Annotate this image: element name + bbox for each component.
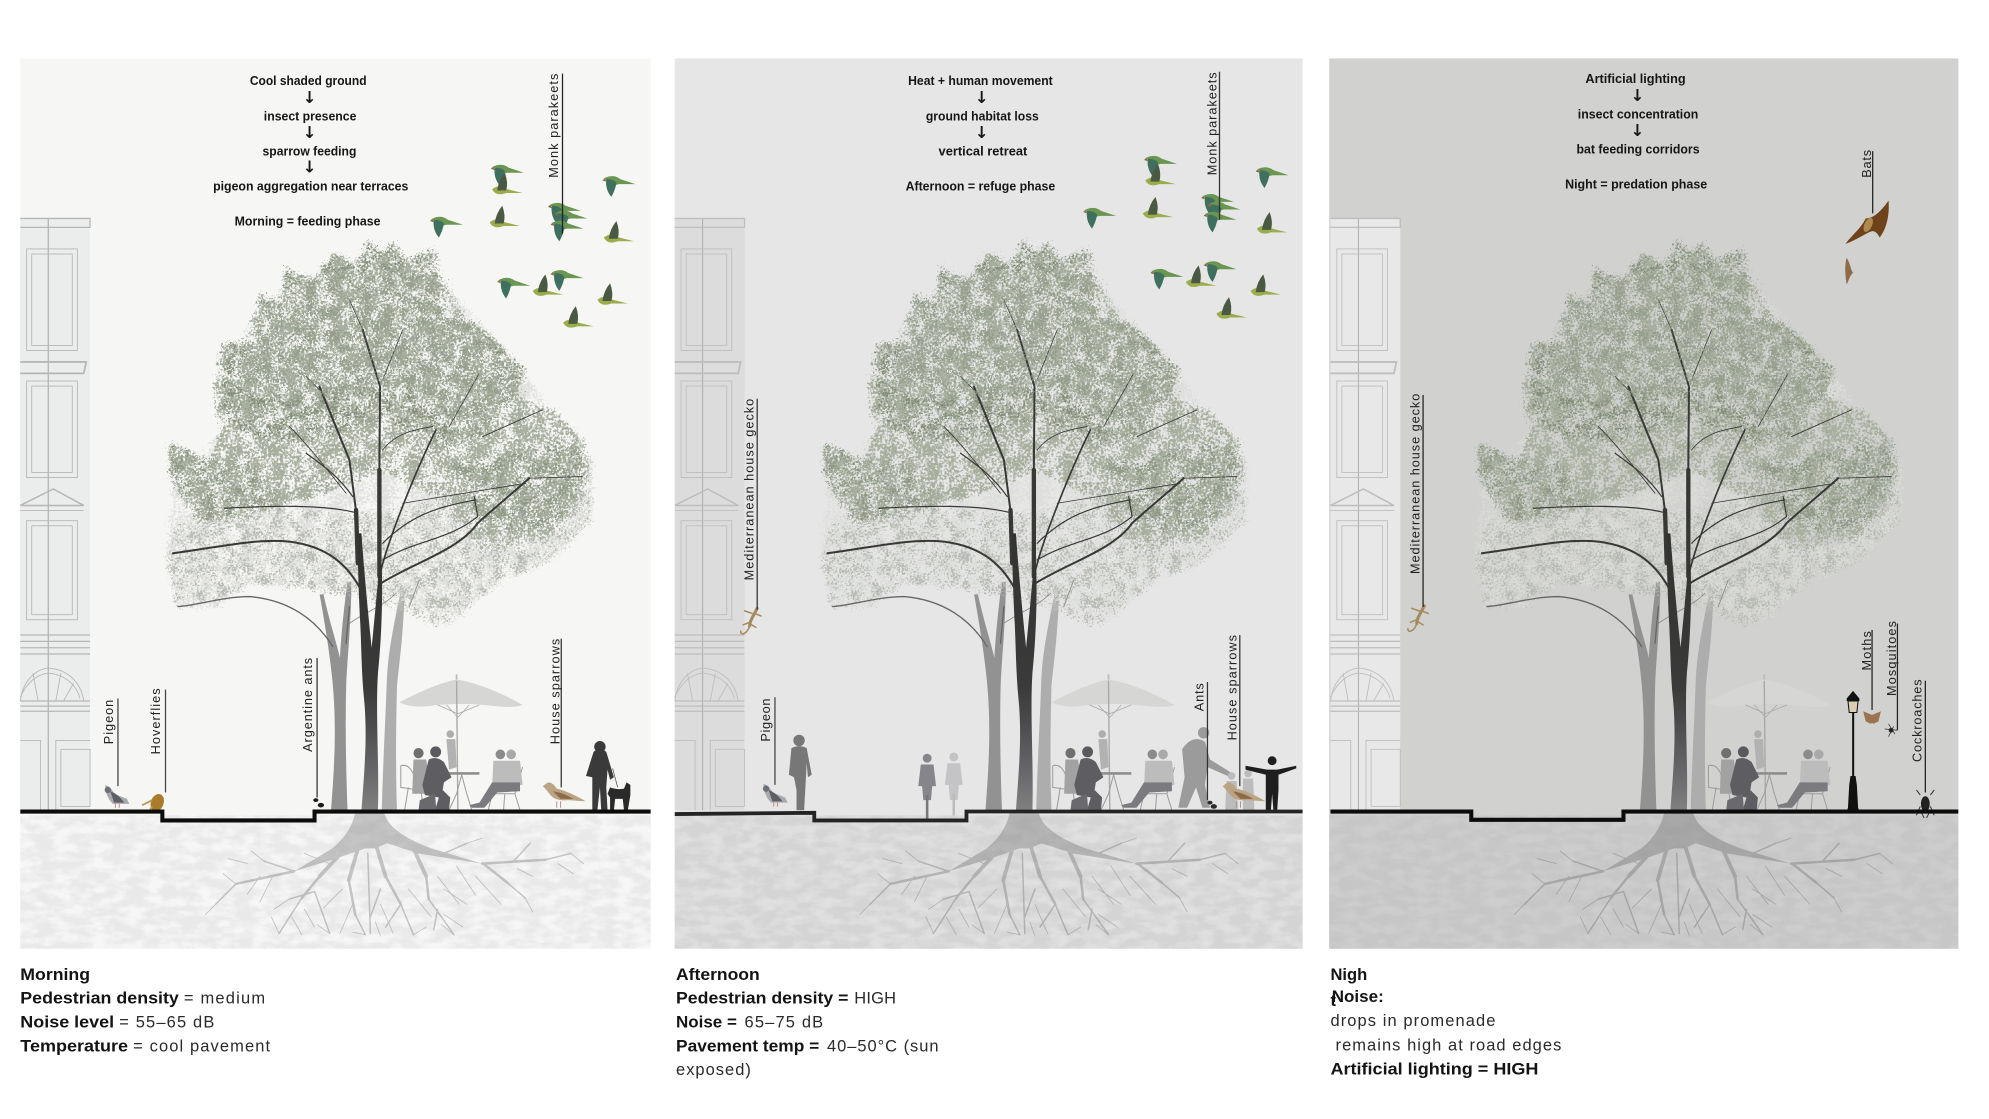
icon: ant (1207, 801, 1217, 809)
caption: afternoon: HIGH (854, 989, 896, 1007)
flow text: morning: pigeon aggregation near terraces (213, 179, 408, 194)
flow text: night: insect concentration (1578, 108, 1698, 122)
pedestrian silhouette (789, 735, 812, 810)
label: Monk parakeets: Monk parakeets (547, 74, 561, 178)
label: House sparrows: House sparrows (548, 639, 562, 744)
children silhouettes (1225, 770, 1254, 810)
afternoon parakeet flock (1083, 156, 1289, 319)
caption: morning: Temperature (20, 1038, 128, 1056)
morning cafe table and diners (401, 730, 523, 810)
morning building facade (20, 218, 90, 810)
flow text: night (1565, 72, 1707, 192)
flow text: morning: Cool shaded ground (250, 74, 367, 88)
label: Cockroaches (1911, 679, 1925, 792)
night sky background (1329, 58, 1958, 949)
caption: morning: Noise level (20, 1013, 114, 1031)
flow text: morning: Morning = feeding phase (235, 214, 380, 228)
child with outstretched arms silhouette (1246, 756, 1296, 810)
label: Moths (1860, 630, 1874, 710)
label: Moths: Moths (1860, 631, 1874, 671)
afternoon tree (821, 240, 1247, 810)
icon: ant (313, 798, 324, 807)
label: Mosquitoes (1885, 621, 1899, 730)
afternoon roots (860, 813, 1238, 936)
dog silhouette (608, 768, 630, 810)
label: Mosquitoes: Mosquitoes (1885, 621, 1899, 696)
icon: sparrow (543, 782, 586, 808)
flow text: afternoon (906, 74, 1055, 194)
flow text: afternoon: Heat + human movement (908, 74, 1053, 88)
caption: morning: = cool pavement (133, 1038, 271, 1056)
flow text: afternoon: ↓ (975, 123, 989, 142)
flow text: night: Night = predation phase (1565, 178, 1707, 192)
flow text: night: Artificial lighting (1585, 72, 1686, 86)
morning cafe umbrella (400, 674, 523, 810)
night roots (1514, 813, 1892, 936)
afternoon building facade (675, 218, 745, 810)
flow text: afternoon: ground habitat loss (926, 110, 1039, 124)
morning soil (20, 815, 651, 949)
label: Pigeon (102, 699, 118, 786)
night ground line (1330, 812, 1958, 820)
icon: sparrow (1223, 782, 1266, 808)
label: Argentine ants (301, 658, 317, 798)
caption: afternoon: Pavement temp = (676, 1038, 819, 1056)
icon: mosquito (1885, 724, 1897, 737)
caption: night: remains high at road edges (1336, 1036, 1561, 1054)
label: Mediterranean house gecko: Mediterranean house gecko (1408, 394, 1422, 574)
caption: night: t (1330, 992, 1336, 1010)
panel: night (1329, 58, 1958, 949)
label: Monk parakeets: Monk parakeets (1205, 72, 1219, 175)
woman walking silhouette (586, 741, 614, 810)
caption: night: Artificial lighting = HIGH (1330, 1060, 1538, 1078)
afternoon cafe table and diners (1053, 730, 1174, 810)
flow text: morning: ↓ (303, 123, 316, 142)
caption: afternoon (676, 966, 939, 1079)
flow text: night: bat feeding corridors (1577, 143, 1700, 157)
caption: afternoon: Afternoon (676, 966, 760, 984)
caption: morning: = 55–65 dB (119, 1013, 214, 1031)
afternoon ground line (675, 812, 1303, 820)
caption: afternoon: Noise = (676, 1013, 737, 1031)
caption: night: Nigh (1330, 966, 1367, 984)
caption: night (1330, 966, 1561, 1078)
morning roots (205, 813, 583, 936)
label: Pigeon: Pigeon (759, 699, 773, 742)
morning tree (166, 240, 592, 810)
icon: gecko (1408, 606, 1428, 631)
label: Cockroaches: Cockroaches (1911, 679, 1925, 762)
icon: small bat (1845, 258, 1853, 284)
flow text: night: ↓ (1631, 86, 1644, 105)
label: Bats (1860, 150, 1874, 213)
morning sky background (20, 58, 651, 949)
label: Bats: Bats (1860, 150, 1874, 178)
caption: morning: Morning (20, 966, 90, 984)
flow text: afternoon: vertical retreat (939, 145, 1028, 159)
panel: morning (20, 58, 651, 949)
afternoon cafe umbrella (1051, 674, 1174, 810)
flow text: morning (213, 74, 408, 228)
icon: gecko (741, 608, 761, 634)
night cafe umbrella (1707, 674, 1830, 810)
night tree (1475, 240, 1901, 810)
label: Mediterranean house gecko: Mediterranean house gecko (742, 399, 756, 580)
icon: street lamp (1847, 691, 1859, 812)
flow text: afternoon: ↓ (975, 88, 989, 107)
caption: afternoon: Pedestrian density = (676, 989, 849, 1007)
panel: afternoon (675, 58, 1303, 949)
morning parakeet flock (430, 165, 635, 328)
cyclist silhouette (918, 754, 936, 819)
flow text: afternoon: Afternoon = refuge phase (906, 179, 1055, 194)
flow text: morning: sparrow feeding (263, 145, 356, 159)
icon: pigeon (105, 785, 129, 808)
night soil (1329, 815, 1958, 949)
icon: cockroach (1916, 790, 1934, 818)
caption: afternoon: 40–50°C (sun (827, 1038, 939, 1056)
label: Ants (1193, 682, 1207, 800)
caption: morning (20, 966, 271, 1056)
caption: morning: Pedestrian density (20, 989, 180, 1007)
flow text: morning: insect presence (264, 110, 356, 124)
night building facade (1330, 218, 1400, 810)
label: House sparrows: House sparrows (1226, 635, 1240, 740)
night cafe table and diners (1708, 730, 1830, 810)
label: Ants: Ants (1193, 683, 1207, 711)
caption: morning: = medium (184, 989, 265, 1007)
label: Argentine ants: Argentine ants (301, 658, 315, 752)
icon: large bat (1845, 201, 1889, 244)
flow text: morning: ↓ (303, 158, 316, 177)
caption: afternoon: exposed) (676, 1061, 751, 1079)
afternoon sky background (675, 58, 1303, 949)
morning ground line (20, 812, 651, 820)
icon: hoverfly (142, 792, 166, 813)
icon: pigeon (763, 784, 788, 806)
hiker with backpack silhouette (1178, 727, 1230, 808)
caption: afternoon: 65–75 dB (745, 1013, 823, 1031)
label: Pigeon: Pigeon (102, 700, 116, 744)
caption: night: Noise: (1332, 988, 1384, 1006)
caption: night: drops in promenade (1330, 1012, 1495, 1030)
label: Pigeon (759, 697, 775, 785)
icon: moth (1863, 711, 1881, 724)
flow text: night: ↓ (1631, 121, 1644, 140)
flow text: morning: ↓ (303, 88, 316, 107)
label: Hoverflies (149, 688, 166, 792)
label: Hoverflies: Hoverflies (149, 688, 163, 754)
afternoon soil (675, 815, 1303, 949)
faded cyclist silhouette (945, 752, 963, 815)
